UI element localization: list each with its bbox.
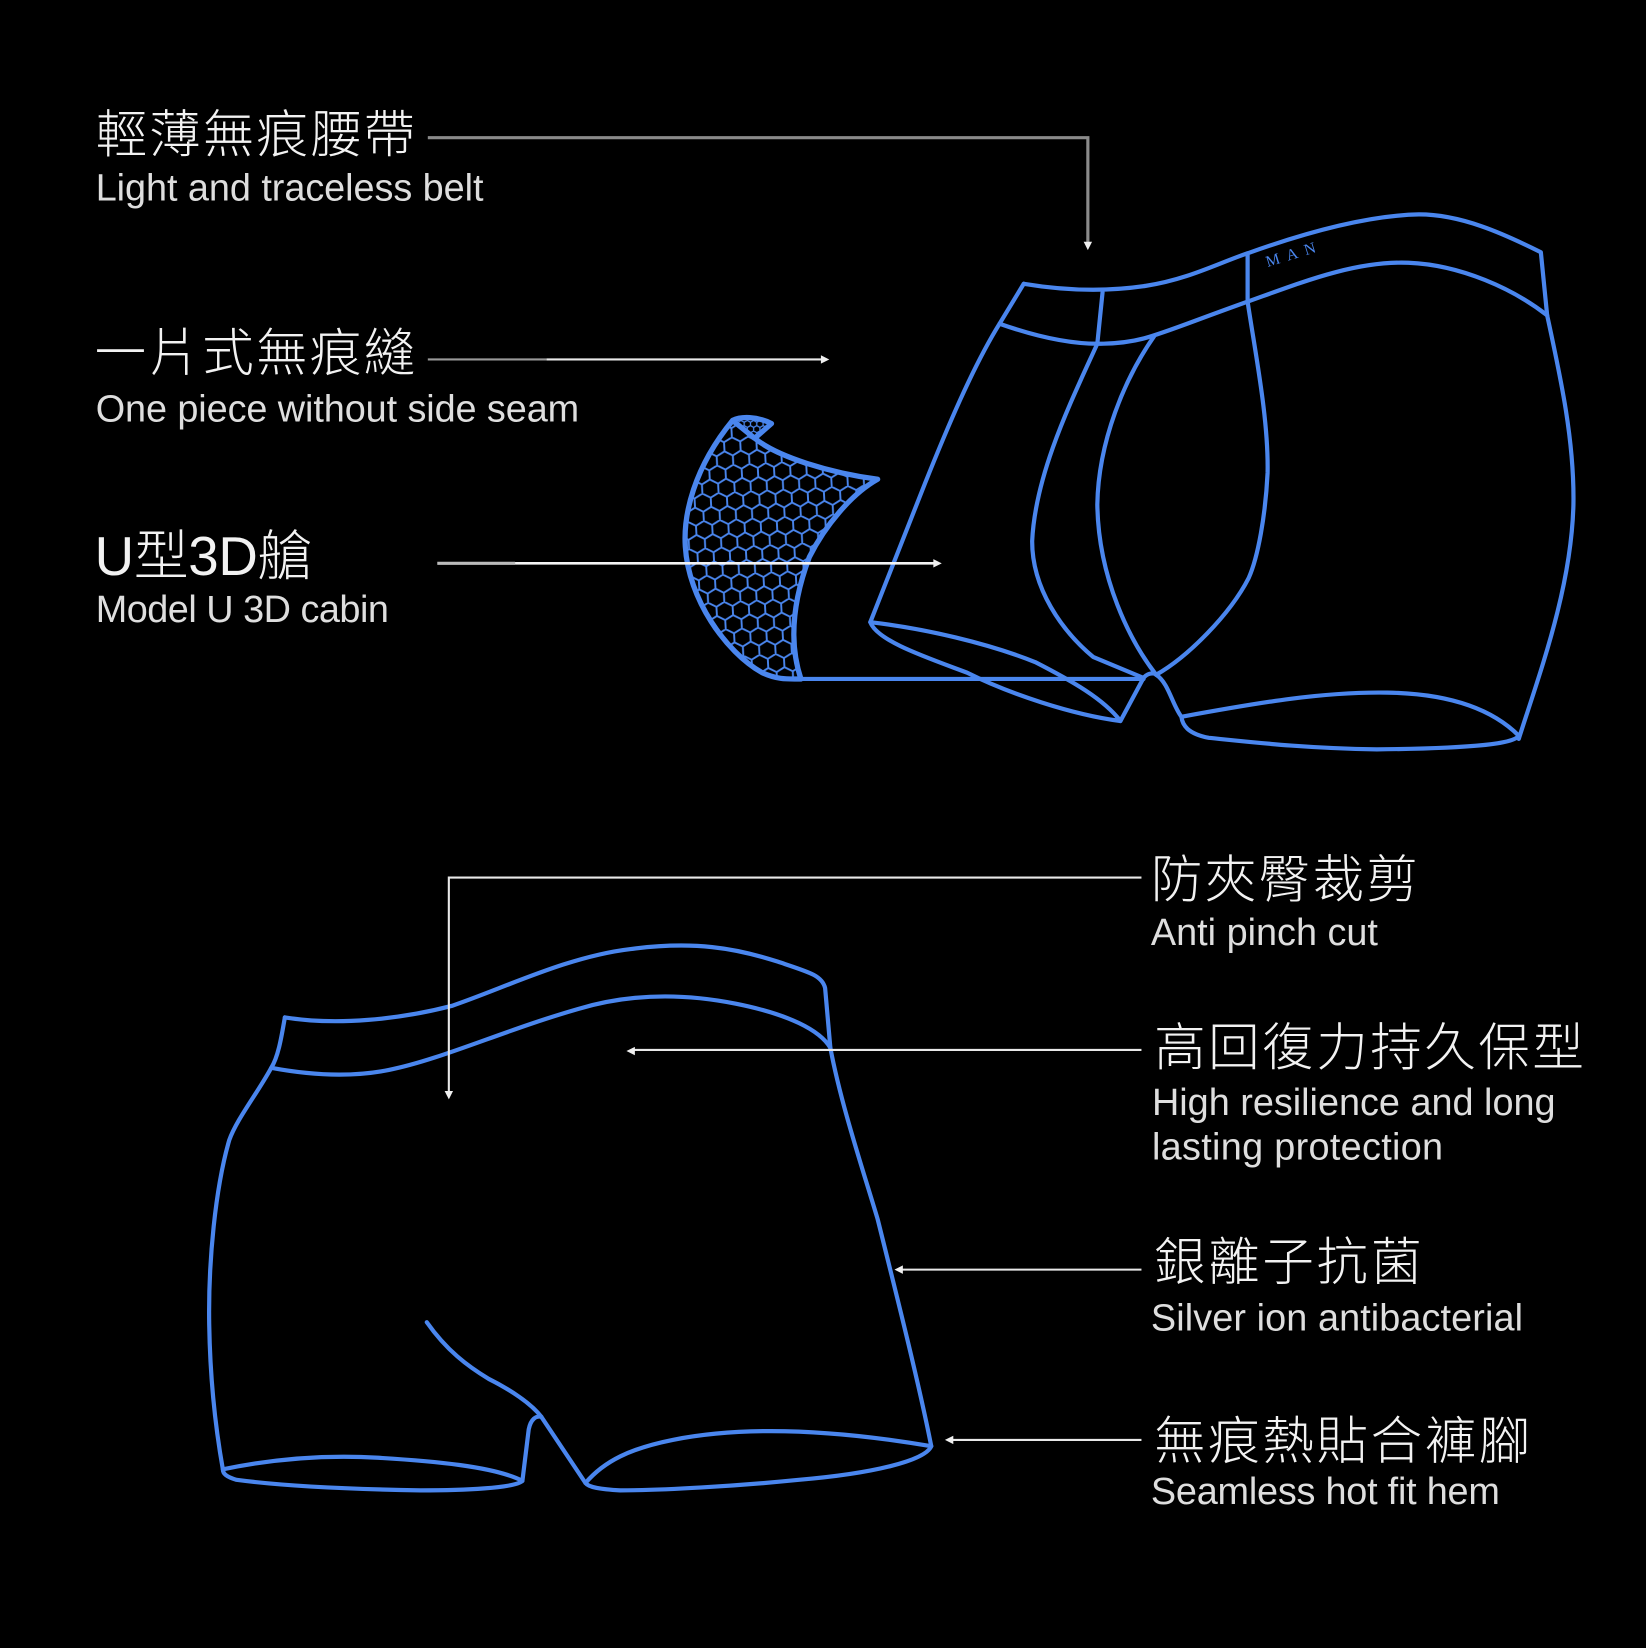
callout: anti pinch cut: 防夾臀裁剪 bbox=[1151, 851, 1418, 909]
U-shaped 3D mesh pouch bbox=[685, 418, 878, 679]
callout: high resilience and long lasting protection bbox=[626, 1019, 1584, 1168]
callout: model U 3D cabin: U型3D艙 bbox=[95, 526, 312, 587]
callout: seamless hot fit hem bbox=[945, 1412, 1530, 1513]
callout: seamless hot fit hem: Seamless hot fit hem bbox=[1151, 1471, 1500, 1513]
lower shorts outline (back view) bbox=[209, 946, 931, 1490]
upper shorts outline (front view) bbox=[801, 214, 1573, 749]
callout: model U 3D cabin: Model U 3D cabin bbox=[96, 589, 389, 631]
callout: light and traceless belt: Light and traceless belt bbox=[96, 168, 484, 210]
callout: one piece without side seam bbox=[95, 324, 829, 430]
callout: silver ion antibacterial: Silver ion antibacterial bbox=[1151, 1298, 1523, 1340]
callout: anti pinch cut bbox=[445, 851, 1418, 1099]
callout: anti pinch cut: Anti pinch cut bbox=[1151, 912, 1378, 954]
callout: one piece without side seam: One piece without side seam bbox=[96, 388, 579, 430]
callout: one piece without side seam: 一片式無痕縫 bbox=[95, 324, 415, 382]
callout: light and traceless belt: 輕薄無痕腰帶 bbox=[96, 105, 415, 163]
callout: light and traceless belt bbox=[96, 105, 1092, 250]
callout: high resilience and long lasting protection: lasting protection bbox=[1152, 1126, 1443, 1168]
callout: silver ion antibacterial bbox=[894, 1233, 1523, 1340]
logo: MAN on waistband: MAN bbox=[1264, 237, 1325, 271]
callout: silver ion antibacterial: 銀離子抗菌 bbox=[1154, 1233, 1422, 1291]
callout: model U 3D cabin bbox=[95, 526, 942, 631]
callout: high resilience and long lasting protection: 高回復力持久保型 bbox=[1154, 1019, 1584, 1077]
callout: seamless hot fit hem: 無痕熱貼合褲腳 bbox=[1154, 1412, 1530, 1470]
callout: high resilience and long lasting protection: High resilience and long bbox=[1152, 1082, 1556, 1124]
